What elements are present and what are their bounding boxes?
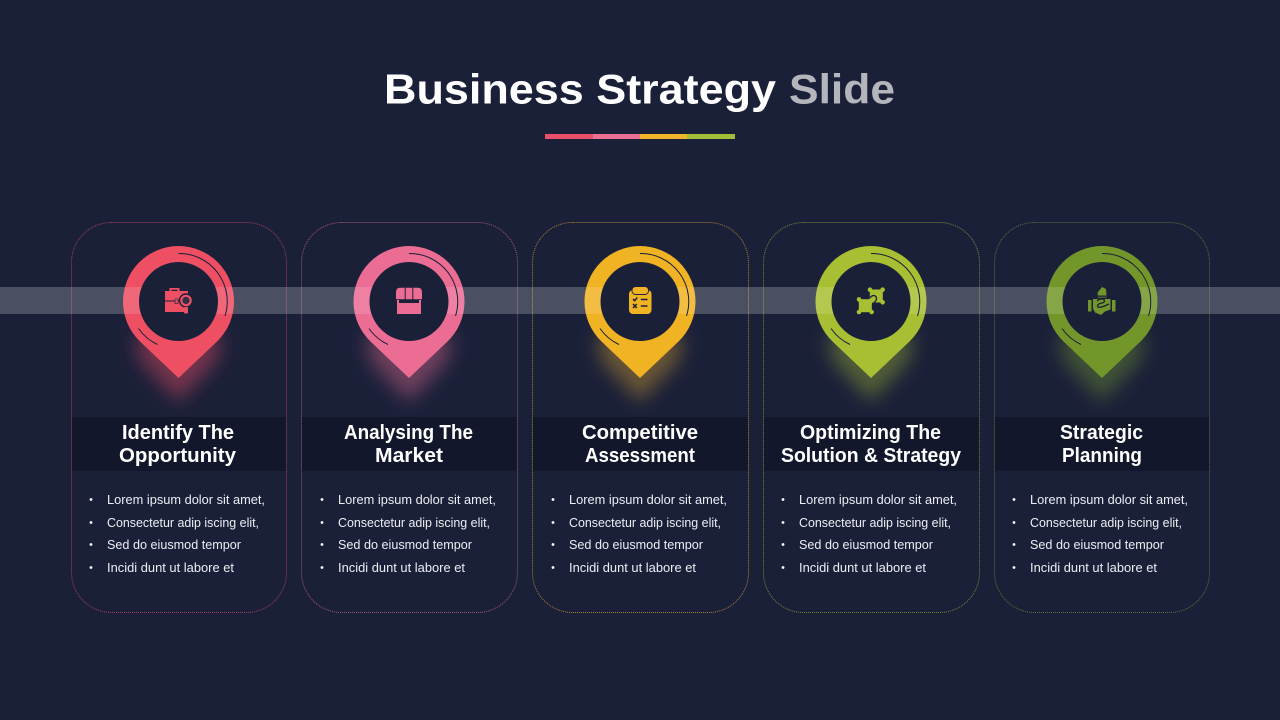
title underline bbox=[545, 134, 735, 139]
pin 4: lime bbox=[811, 246, 931, 402]
heading: Competitive bbox=[582, 422, 698, 444]
heading bbox=[582, 422, 698, 467]
heading: Opportunity bbox=[119, 445, 237, 467]
bullet list bbox=[321, 493, 496, 575]
panel: analysing the market bbox=[302, 222, 518, 612]
bullet list: Sed do eiusmod tempor bbox=[569, 538, 703, 552]
bullet list: Lorem ipsum dolor sit amet, bbox=[338, 493, 496, 507]
icon: market stall bbox=[396, 288, 422, 314]
heading: Market bbox=[375, 445, 443, 467]
bullet list bbox=[1013, 493, 1188, 575]
bullet list: Incidi dunt ut labore et bbox=[1030, 561, 1158, 575]
panel: identify the opportunity bbox=[72, 222, 286, 612]
heading: Strategic bbox=[1060, 422, 1143, 444]
bullet list bbox=[782, 493, 957, 575]
heading: Assessment bbox=[585, 445, 695, 467]
bullet list: Lorem ipsum dolor sit amet, bbox=[1030, 493, 1188, 507]
heading: Identify The bbox=[122, 422, 234, 444]
heading bbox=[781, 422, 962, 467]
bullet list: Consectetur adip iscing elit, bbox=[338, 516, 490, 530]
bullet list bbox=[552, 493, 727, 575]
bullet list: Incidi dunt ut labore et bbox=[799, 561, 927, 575]
heading: Optimizing The bbox=[800, 422, 941, 444]
pin 1: red bbox=[118, 246, 238, 402]
bullet list: Sed do eiusmod tempor bbox=[1030, 538, 1164, 552]
heading bbox=[1060, 422, 1143, 467]
bullet list: Lorem ipsum dolor sit amet, bbox=[799, 493, 957, 507]
pin 3: yellow bbox=[580, 246, 700, 402]
bullet list: Consectetur adip iscing elit, bbox=[799, 516, 951, 530]
pin 2: pink bbox=[349, 246, 469, 402]
icon: handshake with person bbox=[1088, 287, 1116, 315]
bullet list: Sed do eiusmod tempor bbox=[338, 538, 472, 552]
bullet list: Incidi dunt ut labore et bbox=[107, 561, 235, 575]
heading: Solution & Strategy bbox=[781, 445, 962, 467]
bullet list: Sed do eiusmod tempor bbox=[799, 538, 933, 552]
heading bbox=[344, 422, 473, 467]
heading bbox=[119, 422, 237, 467]
panel: strategic planning bbox=[994, 222, 1210, 612]
pin 5: green bbox=[1042, 246, 1162, 402]
icon: puzzle pieces bbox=[857, 287, 885, 314]
heading: Analysing The bbox=[344, 422, 473, 444]
bullet list: Incidi dunt ut labore et bbox=[338, 561, 466, 575]
icon: clipboard checklist bbox=[629, 286, 652, 314]
panel: competitive assessment bbox=[532, 222, 748, 612]
panel: optimizing the solution and strategy bbox=[764, 222, 980, 612]
heading: Planning bbox=[1062, 445, 1142, 467]
bullet list: Consectetur adip iscing elit, bbox=[569, 516, 721, 530]
bullet list bbox=[90, 493, 265, 575]
icon: briefcase with magnifier bbox=[165, 288, 193, 314]
title: Slide bbox=[789, 66, 895, 112]
bullet list: Lorem ipsum dolor sit amet, bbox=[569, 493, 727, 507]
title: Business Strategy bbox=[384, 66, 777, 112]
horizontal band bbox=[0, 287, 1280, 314]
bullet list: Consectetur adip iscing elit, bbox=[107, 516, 259, 530]
bullet list: Lorem ipsum dolor sit amet, bbox=[107, 493, 265, 507]
bullet list: Incidi dunt ut labore et bbox=[569, 561, 697, 575]
bullet list: Consectetur adip iscing elit, bbox=[1030, 516, 1182, 530]
bullet list: Sed do eiusmod tempor bbox=[107, 538, 241, 552]
